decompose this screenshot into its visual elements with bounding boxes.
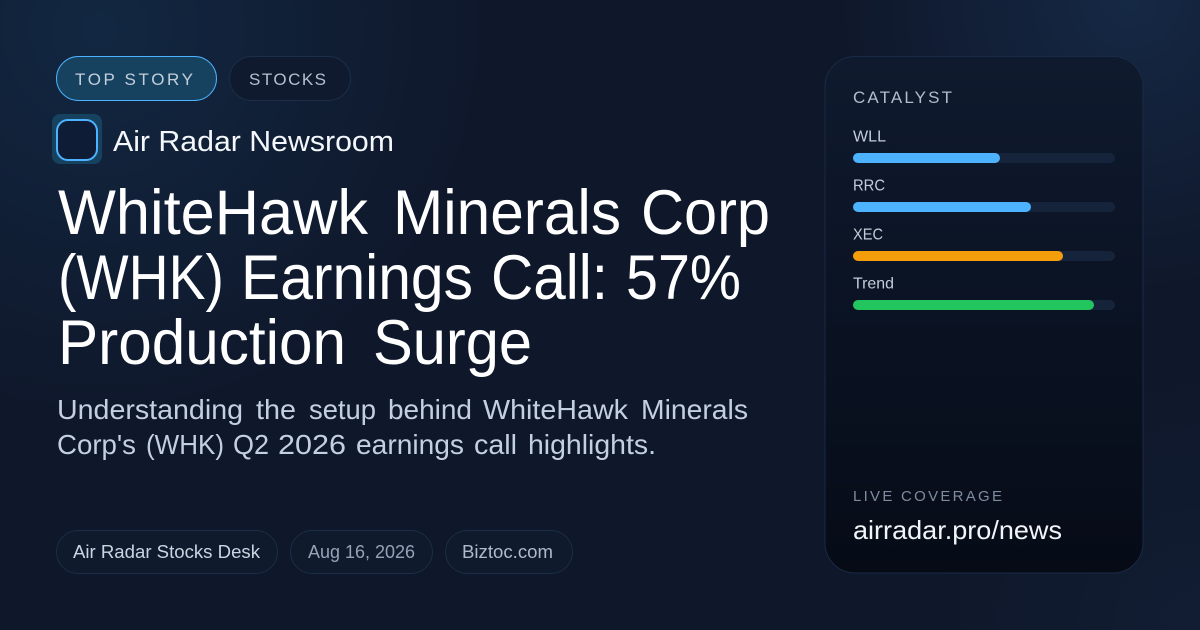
subtitle: (WHK) [146,429,224,460]
tag: stocks: STOCKS [249,70,326,89]
subtitle: WhiteHawk [483,394,629,425]
panel: catalyst card [825,56,1143,573]
subtitle: Corp's [57,429,136,460]
tag: stocks [230,56,350,100]
footer tag: date: Aug 16, 2026 [308,542,415,562]
footer tag: date [290,530,432,574]
title: Minerals [393,178,621,248]
title: Corp [641,178,770,248]
brand: Air Radar Newsroom [52,114,394,164]
title: (WHK) [58,243,224,313]
title: Production [58,308,346,378]
bar: RRC: RRC [853,178,885,194]
title: Surge [373,308,532,378]
subtitle: highlights. [528,429,656,460]
subtitle [57,394,748,460]
title: Earnings [241,243,473,313]
bar: RRC [853,178,1115,212]
subtitle: Minerals [641,394,748,425]
title: Call: [491,243,608,313]
bar: Trend [853,276,1115,310]
subtitle: earnings [356,429,464,460]
footer tag: source: Biztoc.com [462,542,553,562]
footer tag: source [446,530,572,574]
subtitle: call [474,429,517,460]
title: 57% [626,243,741,313]
tag: top story [56,56,216,100]
subtitle: Understanding [57,394,243,425]
title: WhiteHawk [58,178,368,248]
live coverage url: airradar.pro/news [853,515,1062,545]
subtitle: Q2 [233,429,269,460]
footer tag: desk: Air Radar Stocks Desk [73,542,261,562]
brand name: Air Radar Newsroom [113,126,394,158]
icon: brand logo [52,114,102,164]
subtitle: 2026 [278,429,346,460]
subtitle: the [256,394,296,425]
live coverage label: LIVE COVERAGE [853,488,1002,505]
bar: WLL: WLL [853,128,886,146]
bar: XEC: XEC [853,226,883,244]
subtitle: setup [309,394,376,425]
title [58,178,770,378]
tag: top story: TOP STORY [75,70,193,89]
subtitle: behind [388,394,472,425]
footer tag: desk [56,530,278,574]
bar: WLL [853,128,1115,163]
bar: Trend: Trend [853,276,894,292]
card heading: CATALYST [853,88,952,107]
bar: XEC [853,226,1115,261]
